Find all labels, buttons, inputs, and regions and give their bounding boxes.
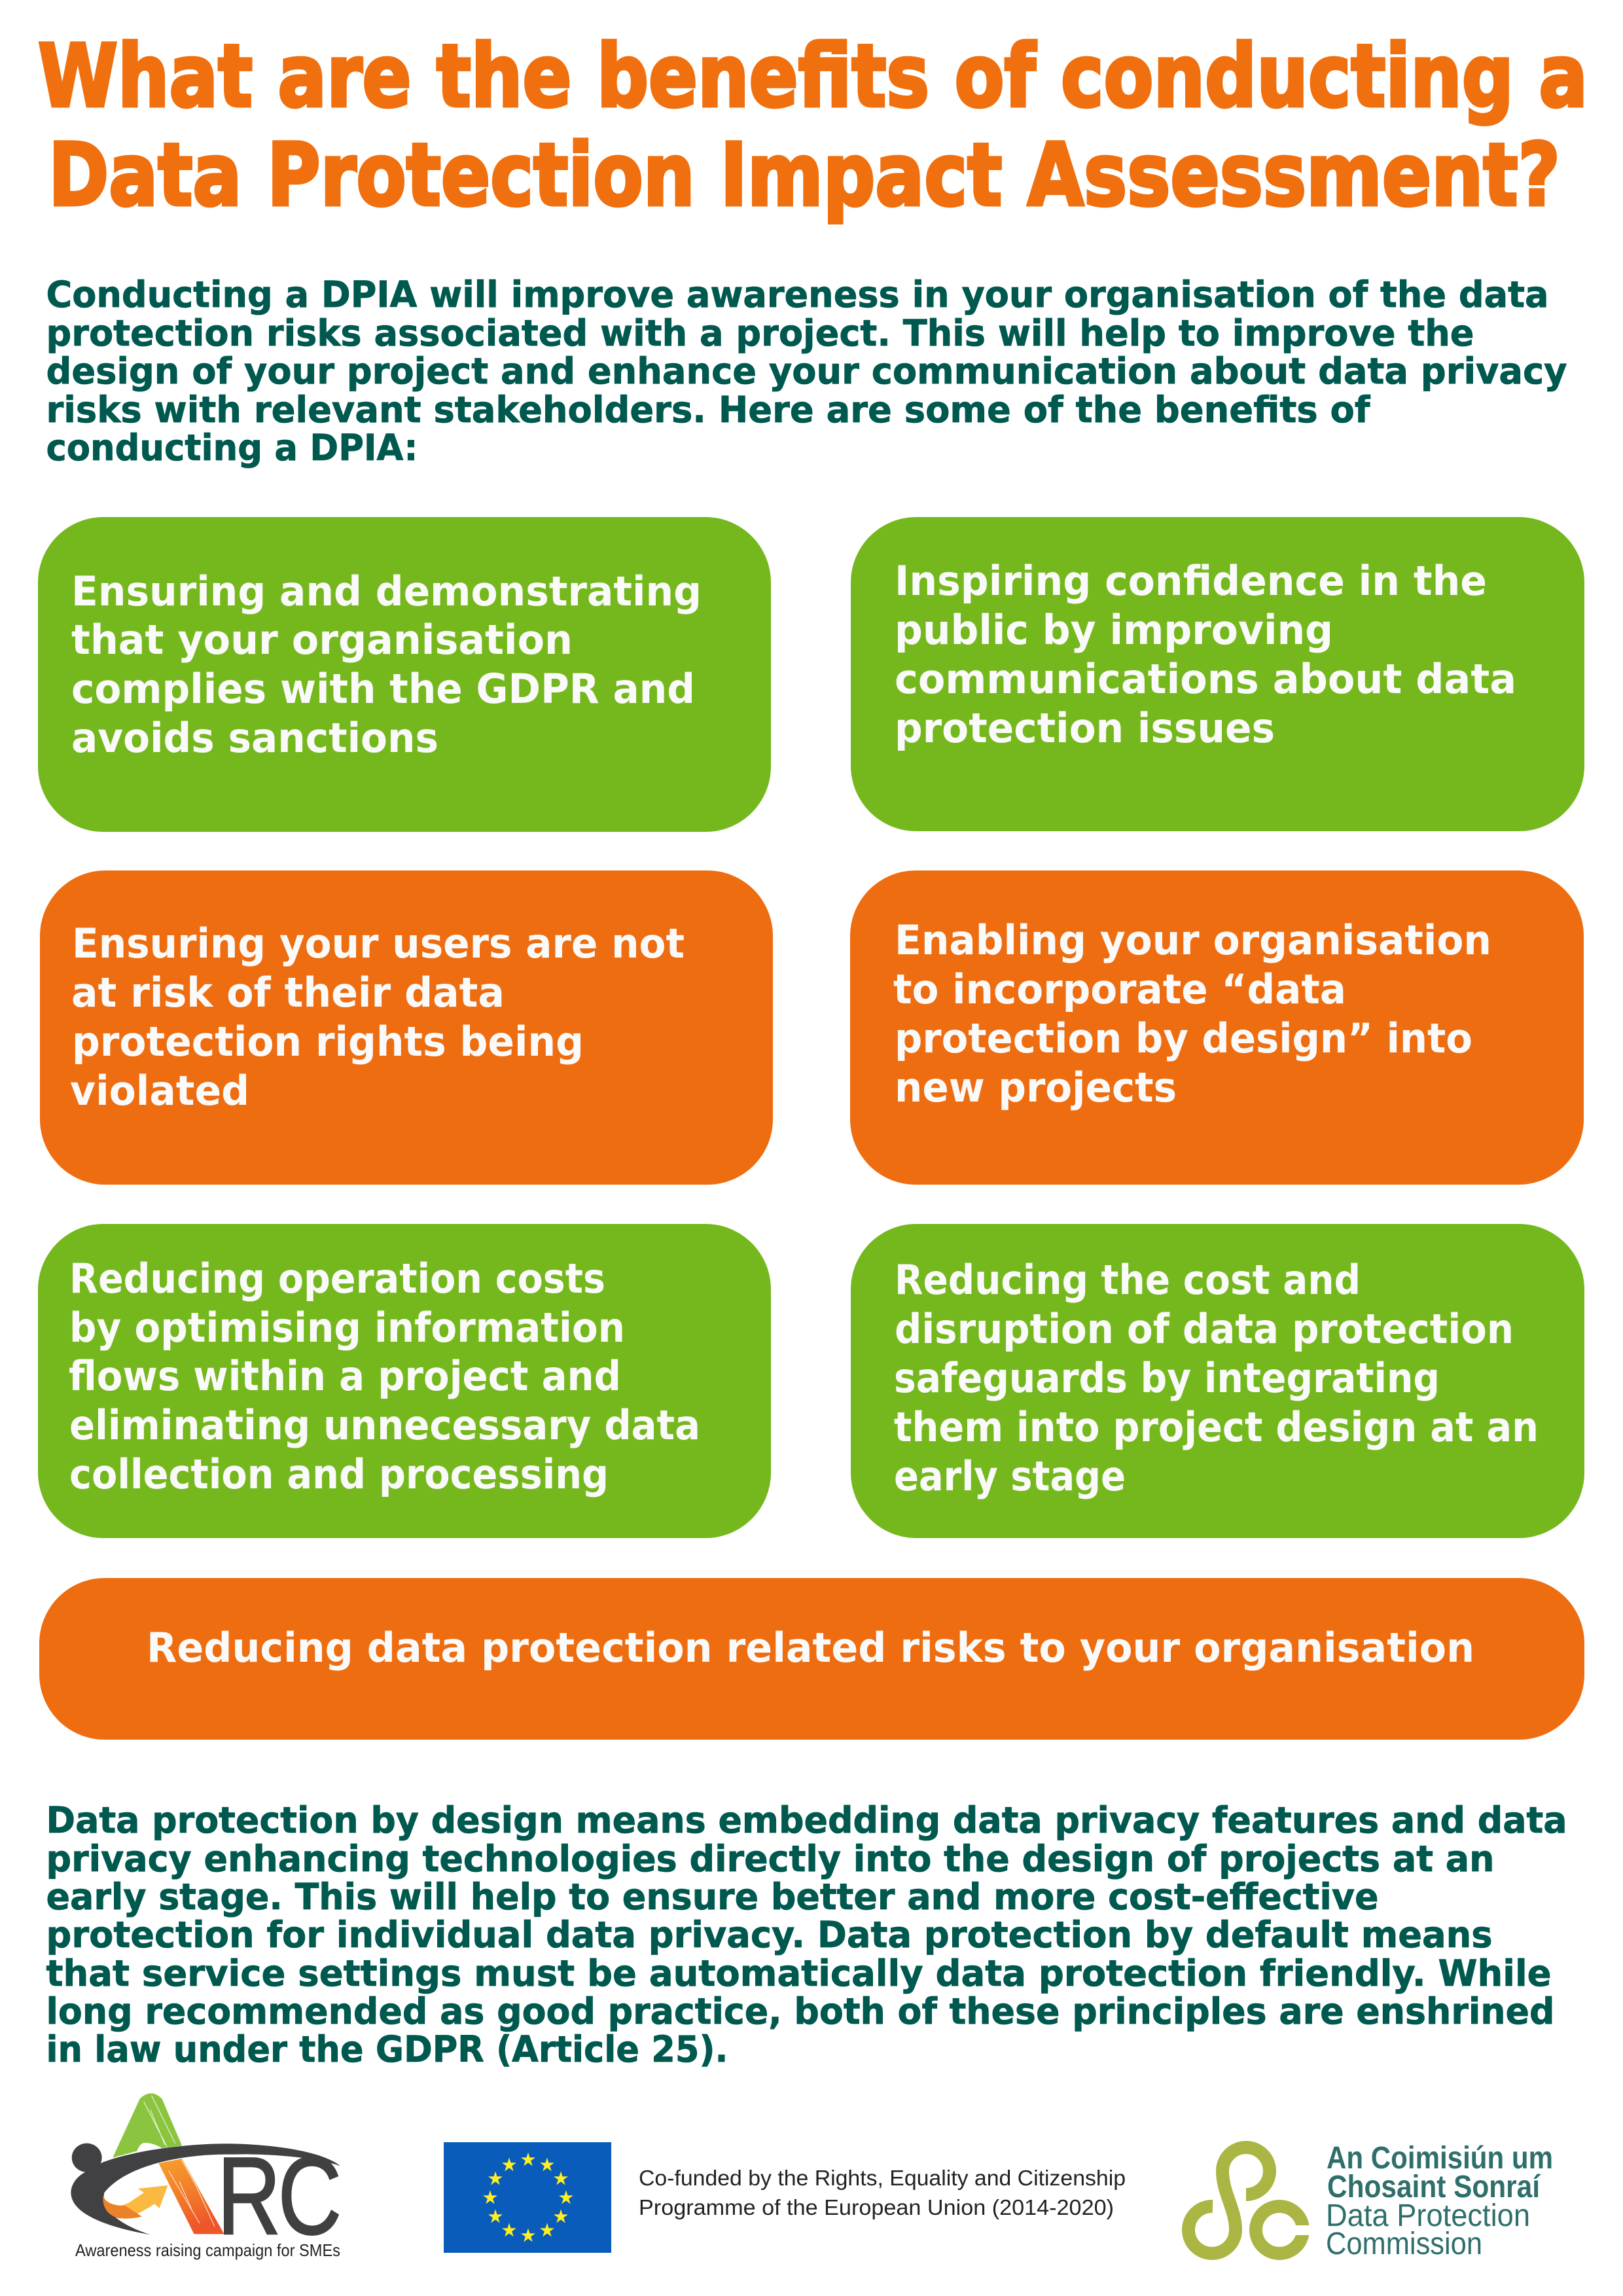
- closing paragraph: that service settings must be automatically data protection friendly. While: [46, 1952, 1551, 1994]
- intro paragraph: design of your project and enhance your communication about data privacy: [46, 350, 1567, 392]
- panel: reducing safeguard costs: disruption of data protection: [895, 1305, 1514, 1353]
- title: [38, 26, 1588, 226]
- co-funding statement: Programme of the European Union (2014-2020): [639, 2195, 1114, 2219]
- panel: reducing safeguard costs: safeguards by integrating: [894, 1354, 1440, 1402]
- panel: reducing safeguard costs: them into project design at an: [894, 1403, 1539, 1451]
- closing paragraph: [46, 1799, 1567, 2070]
- logo: ARC: [71, 2093, 342, 2260]
- panel: GDPR compliance: Ensuring and demonstrating: [71, 567, 702, 615]
- logo: Data Protection Commission: Data Protection: [1326, 2198, 1530, 2233]
- panel: GDPR compliance: complies with the GDPR and: [71, 665, 695, 713]
- panel: reducing safeguard costs: early stage: [894, 1452, 1126, 1500]
- panel: reducing risks: [39, 1578, 1584, 1740]
- panel: GDPR compliance: avoids sanctions: [71, 714, 438, 762]
- panel: user rights: violated: [70, 1067, 249, 1115]
- panel: protection by design: new projects: [895, 1064, 1177, 1111]
- panel: public confidence: protection issues: [895, 704, 1275, 752]
- panel: public confidence: public by improving: [895, 606, 1333, 654]
- panel: reducing risks: Reducing data protection related risks to your organisation: [147, 1624, 1474, 1672]
- panel: reducing operation costs: Reducing operation costs: [69, 1255, 605, 1302]
- closing paragraph: Data protection by design means embedding data privacy features and data: [46, 1799, 1567, 1841]
- panel: public confidence: Inspiring confidence in the: [895, 557, 1487, 605]
- panel: reducing safeguard costs: [851, 1224, 1584, 1538]
- closing paragraph: in law under the GDPR (Article 25).: [46, 2028, 728, 2070]
- panel: public confidence: [851, 517, 1584, 831]
- panel: reducing safeguard costs: Reducing the cost and: [895, 1256, 1361, 1304]
- panel: GDPR compliance: that your organisation: [71, 616, 573, 664]
- panel: user rights: Ensuring your users are not: [72, 920, 685, 967]
- panel: user rights: [40, 870, 773, 1185]
- panel: user rights: protection rights being: [72, 1018, 584, 1066]
- logo: Data Protection Commission: Commission: [1326, 2227, 1482, 2261]
- panel: protection by design: protection by design” into: [895, 1014, 1472, 1062]
- panel: protection by design: to incorporate “data: [893, 965, 1346, 1013]
- panel: protection by design: [850, 870, 1584, 1185]
- logo: Data Protection Commission: [1188, 2141, 1553, 2261]
- icon: EU flag: [444, 2142, 611, 2253]
- panel: reducing operation costs: [38, 1224, 771, 1538]
- intro paragraph: protection risks associated with a project. This will help to improve the: [46, 312, 1474, 354]
- logo: ARC: Awareness raising campaign for SMEs: [75, 2240, 340, 2260]
- panel: user rights: at risk of their data: [71, 969, 505, 1016]
- panel: reducing operation costs: eliminating unnecessary data: [69, 1401, 700, 1449]
- logo: ARC: RC: [217, 2135, 342, 2257]
- closing paragraph: protection for individual data privacy. Data protection by default means: [46, 1914, 1492, 1956]
- panel: GDPR compliance: [38, 517, 771, 832]
- co-funding statement: [639, 2166, 1126, 2219]
- logo: Data Protection Commission: Chosaint Sonraí: [1327, 2170, 1541, 2204]
- closing paragraph: long recommended as good practice, both of these principles are enshrined: [46, 1990, 1555, 2032]
- panel: reducing operation costs: by optimising information: [69, 1304, 625, 1352]
- intro paragraph: Conducting a DPIA will improve awareness in your organisation of the data: [46, 274, 1548, 315]
- panel: public confidence: communications about data: [895, 655, 1516, 703]
- intro paragraph: conducting a DPIA:: [46, 427, 418, 469]
- panel: protection by design: Enabling your organisation: [895, 916, 1491, 964]
- co-funding statement: Co-funded by the Rights, Equality and Citizenship: [639, 2166, 1126, 2190]
- logo: Data Protection Commission: An Coimisiún um: [1327, 2141, 1553, 2176]
- panel: reducing operation costs: collection and processing: [69, 1450, 609, 1498]
- intro paragraph: [46, 274, 1567, 469]
- panel: reducing operation costs: flows within a project and: [69, 1352, 621, 1400]
- intro paragraph: risks with relevant stakeholders. Here are some of the benefits of: [46, 389, 1371, 431]
- closing paragraph: early stage. This will help to ensure better and more cost-effective: [46, 1876, 1378, 1918]
- closing paragraph: privacy enhancing technologies directly into the design of projects at an: [46, 1838, 1495, 1880]
